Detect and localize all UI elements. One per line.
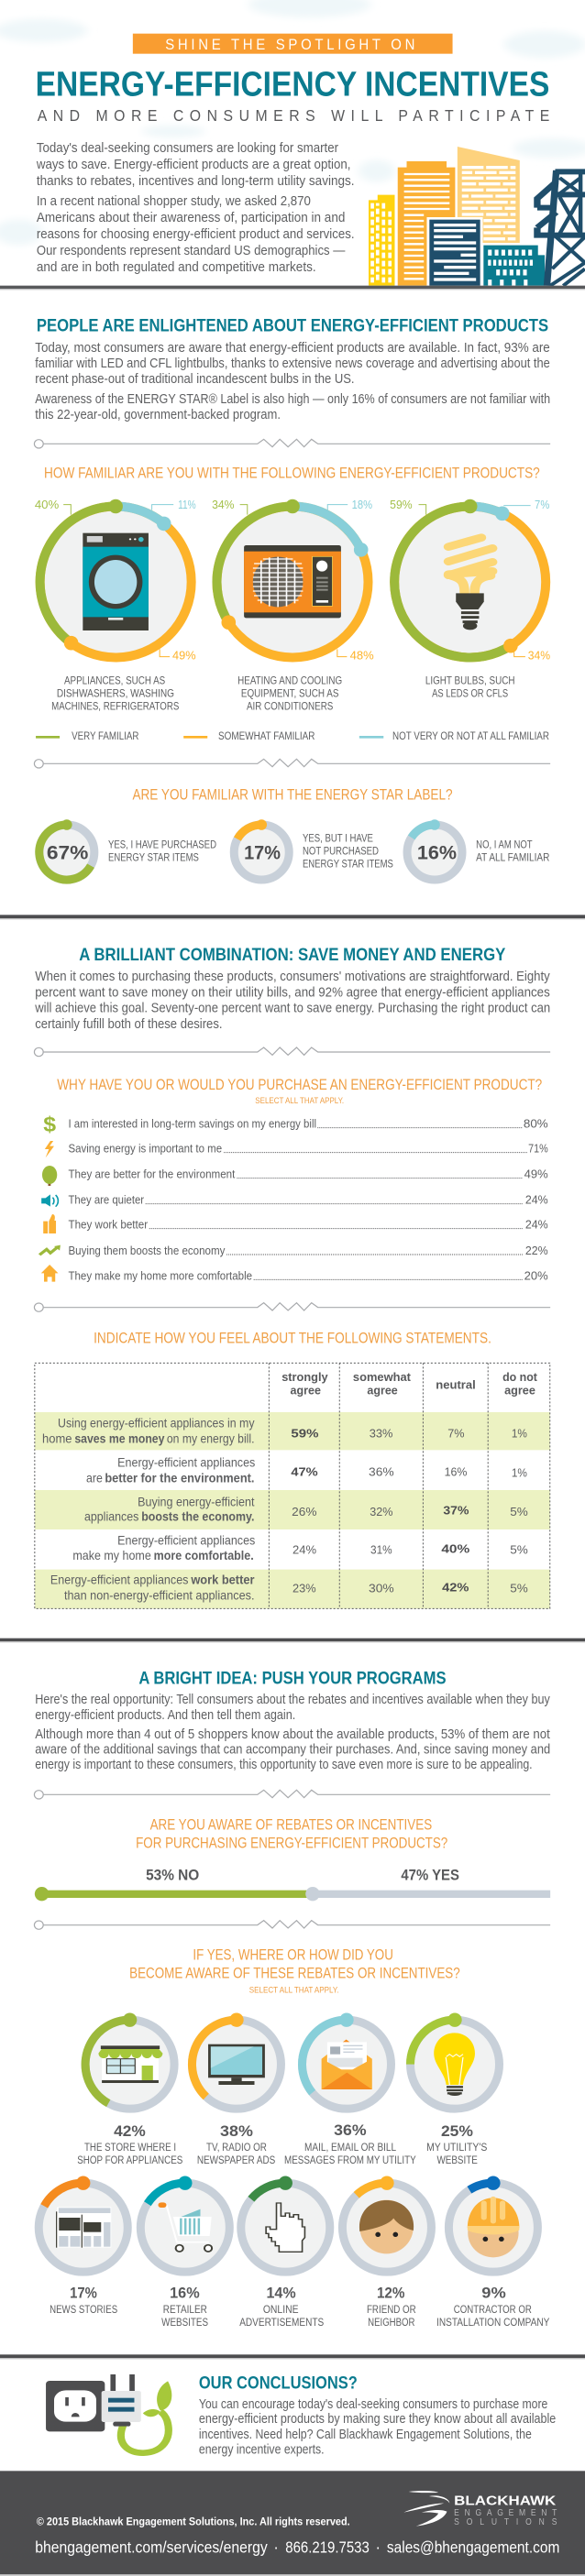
chart: 16% not familiar donut: 16% xyxy=(417,842,457,863)
caption: appliances xyxy=(51,674,180,712)
chart: 67% purchased donut: 67% xyxy=(47,842,89,863)
section rule xyxy=(0,2354,585,2360)
panel: awareness section xyxy=(10,317,575,890)
item: environment 49% xyxy=(42,1166,548,1186)
row: boosts economy xyxy=(84,1496,528,1524)
row: saves money: 59% xyxy=(291,1427,319,1440)
row: boosts economy: 26% xyxy=(292,1505,317,1518)
icon: outlet and plug with leaves xyxy=(46,2374,171,2453)
row: more comfortable: 40% xyxy=(441,1542,470,1555)
item: friend 12% xyxy=(324,2165,450,2329)
icon: hard hat worker xyxy=(468,2198,519,2257)
caption: appliances: DISHWASHERS, WASHING xyxy=(57,687,174,699)
chart: 16% not familiar donut xyxy=(397,815,549,890)
item: saving energy 71%: 71% xyxy=(528,1142,548,1155)
table header: agree xyxy=(291,1385,321,1398)
row: better for environment: 47% xyxy=(291,1465,318,1478)
item: friend 12%: NEIGHBOR xyxy=(368,2316,414,2329)
row: work better: 30% xyxy=(369,1582,394,1595)
row: better for environment: better for the environment. xyxy=(105,1472,254,1485)
text block: intro: Today's deal-seeking consumers are looking for smarter xyxy=(37,140,338,156)
item: mail 36%: MAIL, EMAIL OR BILL xyxy=(304,2141,396,2154)
label: 34%: 34% xyxy=(528,649,551,662)
legend: familiarity xyxy=(36,729,549,742)
banner: shine the spotlight on: SHINE THE SPOTLIGHT ON xyxy=(165,37,414,53)
chart: 53% no vs 47% yes bar: 47% YES xyxy=(401,1867,459,1883)
icon: television xyxy=(208,2044,265,2085)
icon: pointer hand xyxy=(266,2203,304,2252)
item: store 42%: 42% xyxy=(114,2123,146,2140)
item: tv radio 38%: 38% xyxy=(220,2123,253,2140)
text block: intro: Our respondents represent standard US demographics — xyxy=(37,243,346,258)
text block: intro: and are in both regulated and competitive markets. xyxy=(37,259,316,275)
text block: intro: thanks to rebates, incentives and long-term utility savings. xyxy=(37,173,355,189)
item: saving energy 71%: Saving energy is important to me xyxy=(68,1142,222,1155)
item: work better 24% xyxy=(43,1214,548,1233)
text block: conclusions: energy incentive experts. xyxy=(199,2441,325,2457)
row: more comfortable: Energy-efficient appliances xyxy=(117,1534,256,1548)
item: utility website 25%: MY UTILITY'S xyxy=(426,2141,488,2154)
chart: 67% purchased donut xyxy=(29,815,216,890)
heading: why purchase xyxy=(57,1076,542,1106)
row: saves money: 1% xyxy=(512,1427,527,1440)
item: mail 36%: 36% xyxy=(334,2122,367,2139)
background clouds xyxy=(0,0,585,245)
item: online ads 14%: 14% xyxy=(267,2285,296,2301)
caption: heating and cooling: HEATING AND COOLING xyxy=(237,674,342,686)
heading: where or how: SELECT ALL THAT APPLY. xyxy=(249,1986,338,1995)
row: better for environment: 16% xyxy=(445,1465,468,1478)
banner: shine the spotlight on xyxy=(133,34,453,54)
text block: motivations xyxy=(34,969,550,1032)
row: more comfortable: more comfortable. xyxy=(154,1549,254,1563)
contact line: bhengagement.com/services/energy xyxy=(35,2538,268,2557)
item: retailer websites 16%: WEBSITES xyxy=(161,2316,208,2329)
item: economy 22%: 22% xyxy=(525,1244,548,1257)
contact line: · xyxy=(375,2538,381,2557)
item: news stories 17% xyxy=(23,2167,144,2316)
item: utility website 25% xyxy=(410,2012,500,2166)
item: comfortable 20%: 20% xyxy=(524,1269,548,1282)
icon: washing machine xyxy=(83,533,149,630)
logo: Blackhawk Engagement Solutions: BLACKHAWK xyxy=(454,2494,556,2508)
chart: 17% not purchased donut: YES, BUT I HAVE xyxy=(303,832,373,844)
item: economy 22% xyxy=(39,1244,548,1257)
text block: intro: Americans about their awareness of, participation in and xyxy=(37,210,345,225)
item: quieter 24%: 24% xyxy=(525,1193,548,1206)
icon: shopping cart xyxy=(159,2202,212,2252)
caption: heating and cooling: AIR CONDITIONERS xyxy=(247,700,334,712)
label: 34% xyxy=(212,498,248,515)
heading: aware of rebates: ARE YOU AWARE OF REBATES OR INCENTIVES xyxy=(150,1815,432,1833)
icon: light bulb xyxy=(434,2033,475,2096)
chart: 17% not purchased donut: 17% xyxy=(244,842,281,863)
chart: 17% not purchased donut xyxy=(224,815,393,890)
item: tv radio 38%: NEWSPAPER ADS xyxy=(197,2154,276,2166)
caption: light bulbs: LIGHT BULBS, SUCH xyxy=(425,674,515,686)
row: more comfortable: 24% xyxy=(292,1543,316,1556)
table header: do not xyxy=(502,1371,537,1385)
text block: awareness intro: recent phase-out of traditional incandescent bulbs in the US. xyxy=(35,371,355,387)
chart: 53% no vs 47% yes bar xyxy=(35,1867,550,1901)
chart: 67% purchased donut: YES, I HAVE PURCHASED xyxy=(108,839,216,850)
icon: CFL bulb xyxy=(448,538,492,630)
label: 59% xyxy=(390,498,426,515)
copyright: © 2015 Blackhawk Engagement Solutions, Inc. All rights reserved. xyxy=(37,2516,350,2527)
row: work better: Energy-efficient appliances xyxy=(50,1573,189,1587)
item: economy 22%: Buying them boosts the economy xyxy=(68,1244,226,1257)
item: store 42%: SHOP FOR APPLIANCES xyxy=(77,2154,183,2166)
row: boosts economy: appliances xyxy=(84,1510,139,1524)
icon: air conditioner xyxy=(244,545,341,618)
icon: neighbor face xyxy=(359,2200,414,2253)
table header: agree xyxy=(504,1385,535,1398)
chart: heating and cooling familiarity ring xyxy=(188,477,397,712)
chart: 16% not familiar donut: AT ALL FAMILIAR xyxy=(476,851,549,863)
chart: appliances familiarity ring xyxy=(10,477,221,712)
label: 11% xyxy=(152,498,196,511)
item: saving energy 71% xyxy=(45,1141,548,1157)
label: 40% xyxy=(35,498,71,515)
chart: light bulbs familiarity ring xyxy=(366,477,575,699)
row: saves money: 33% xyxy=(370,1427,393,1440)
panel: push your programs section xyxy=(23,1669,555,2329)
item: news stories 17%: NEWS STORIES xyxy=(50,2303,117,2316)
item: long-term savings 80%: 80% xyxy=(524,1117,548,1130)
item: mail 36%: MESSAGES FROM MY UTILITY xyxy=(284,2154,416,2166)
legend: familiarity: VERY FAMILIAR xyxy=(72,729,138,742)
label: 7%: 7% xyxy=(535,498,550,511)
row: boosts economy: 5% xyxy=(510,1505,528,1518)
row: better for environment: 36% xyxy=(369,1465,394,1478)
caption: light bulbs xyxy=(425,674,515,699)
icon: envelope xyxy=(322,2040,372,2089)
chart: 17% not purchased donut: ENERGY STAR ITEMS xyxy=(303,858,393,870)
heading: bright idea: A BRIGHT IDEA: PUSH YOUR PROGRAMS xyxy=(138,1669,447,1688)
caption: heating and cooling: EQUIPMENT, SUCH AS xyxy=(241,687,339,699)
table: agreement statements xyxy=(35,1363,550,1608)
row: more comfortable xyxy=(72,1534,528,1563)
text block: opportunity: energy-efficient products. And then tell them again. xyxy=(35,1707,295,1723)
item: work better 24%: They work better xyxy=(68,1218,148,1231)
text block: conclusions xyxy=(199,2396,556,2457)
icon: newspaper xyxy=(56,2207,111,2248)
item: environment 49%: 49% xyxy=(524,1167,548,1180)
item: friend 12%: FRIEND OR xyxy=(367,2303,416,2316)
row: better for environment: Energy-efficient appliances xyxy=(117,1456,256,1470)
label: 40%: 40% xyxy=(35,498,60,511)
chart: 16% not familiar donut: NO, I AM NOT xyxy=(476,839,533,850)
panel: conclusions xyxy=(46,2374,556,2457)
text block: intro: ways to save. Energy-efficient products are a great option, xyxy=(36,157,350,172)
row: saves money xyxy=(42,1417,527,1446)
item: long-term savings 80%: $ xyxy=(43,1112,57,1136)
text block: intro xyxy=(36,140,355,275)
text block: awareness intro: this 22-year-old, government-backed program. xyxy=(35,407,281,422)
item: work better 24%: 24% xyxy=(525,1218,548,1231)
section rule xyxy=(0,286,585,290)
table header: strongly xyxy=(281,1371,328,1385)
label: 48% xyxy=(337,649,374,662)
caption: appliances: MACHINES, REFRIGERATORS xyxy=(51,700,180,712)
logo: Blackhawk Engagement Solutions xyxy=(403,2491,557,2527)
item: utility website 25%: 25% xyxy=(441,2123,473,2140)
table header: agree xyxy=(367,1385,398,1398)
item: quieter 24%: They are quieter xyxy=(68,1193,144,1206)
chart: 53% no vs 47% yes bar: 53% NO xyxy=(146,1867,199,1883)
subtitle: AND MORE CONSUMERS WILL PARTICIPATE xyxy=(38,106,549,125)
row: boosts economy: Buying energy-efficient xyxy=(138,1496,255,1509)
row: boosts economy: 37% xyxy=(443,1504,469,1517)
item: tv radio 38%: TV, RADIO OR xyxy=(206,2141,267,2154)
item: mail 36% xyxy=(284,2001,416,2166)
item: news stories 17%: 17% xyxy=(70,2285,97,2301)
row: saves money: Using energy-efficient appliances in my xyxy=(58,1417,255,1431)
row: work better: than non-energy-efficient appliances. xyxy=(64,1589,254,1603)
item: long-term savings 80%: I am interested in long-term savings on my energy bill xyxy=(68,1117,316,1130)
item: contractor 9% xyxy=(432,2166,555,2329)
label: 11%: 11% xyxy=(178,498,196,511)
label: 18%: 18% xyxy=(352,498,372,511)
row: boosts economy: 32% xyxy=(370,1505,393,1518)
item: online ads 14%: ADVERTISEMENTS xyxy=(239,2316,324,2329)
section rule xyxy=(0,1639,585,1643)
item: store 42%: THE STORE WHERE I xyxy=(84,2141,176,2154)
item: contractor 9%: 9% xyxy=(481,2285,506,2301)
item: utility website 25%: WEBSITE xyxy=(436,2154,478,2166)
text block: awareness intro xyxy=(35,340,550,422)
list: purchase reasons xyxy=(39,1112,548,1282)
table header xyxy=(281,1371,537,1398)
row: better for environment: 1% xyxy=(512,1466,527,1479)
row: work better: 23% xyxy=(292,1582,316,1595)
row: work better: work better xyxy=(190,1573,255,1587)
table header: neutral xyxy=(436,1379,476,1392)
text block: motivations: certainly fufill both of these desires. xyxy=(35,1016,223,1032)
label: 18% xyxy=(327,498,372,511)
row: more comfortable: 31% xyxy=(370,1543,392,1556)
row: work better: 5% xyxy=(510,1582,528,1595)
caption: appliances: APPLIANCES, SUCH AS xyxy=(64,674,165,686)
heading: aware of rebates xyxy=(136,1815,447,1851)
panel: save money and energy section xyxy=(34,946,550,1608)
item: retailer websites 16%: 16% xyxy=(170,2285,200,2301)
section rule xyxy=(0,915,585,920)
item: online ads 14% xyxy=(223,2165,348,2329)
logo: Blackhawk Engagement Solutions: SOLUTIONS xyxy=(454,2516,557,2527)
item: friend 12%: 12% xyxy=(377,2285,404,2301)
row: more comfortable: make my home xyxy=(72,1549,151,1563)
row: saves money: 7% xyxy=(447,1427,465,1440)
item: store 42% xyxy=(70,2004,190,2166)
heading: why purchase: SELECT ALL THAT APPLY. xyxy=(255,1097,344,1106)
contact line xyxy=(35,2538,559,2557)
chart: 67% purchased donut: ENERGY STAR ITEMS xyxy=(108,851,199,863)
caption: heating and cooling xyxy=(237,674,342,712)
heading: where or how: IF YES, WHERE OR HOW DID YOU xyxy=(193,1946,393,1963)
label: 34% xyxy=(514,649,551,662)
label: 49%: 49% xyxy=(172,649,196,662)
row: saves money: home xyxy=(42,1432,72,1446)
row: saves money: on my energy bill. xyxy=(167,1432,254,1446)
item: long-term savings 80% xyxy=(43,1112,548,1136)
contact line: 866.219.7533 xyxy=(285,2538,370,2557)
contact line: · xyxy=(273,2538,279,2557)
row: better for environment: are xyxy=(86,1472,103,1485)
chart: 17% not purchased donut: NOT PURCHASED xyxy=(303,845,379,857)
item: comfortable 20%: They make my home more comfortable xyxy=(68,1269,252,1282)
icon: store xyxy=(98,2045,162,2083)
logo: Blackhawk Engagement Solutions: ENGAGEMENT xyxy=(454,2507,557,2517)
footer xyxy=(0,2471,585,2576)
illustration: city skyline and power tower xyxy=(369,147,585,286)
text block: opportunity xyxy=(35,1692,550,1772)
row: work better xyxy=(50,1573,528,1603)
row: better for environment xyxy=(86,1456,527,1485)
label: 49% xyxy=(160,649,196,662)
item: tv radio 38% xyxy=(173,2001,300,2166)
row: saves money: saves me money xyxy=(74,1432,165,1446)
row: more comfortable: 5% xyxy=(510,1543,528,1556)
item: retailer websites 16% xyxy=(124,2166,247,2329)
label: 59%: 59% xyxy=(390,498,413,511)
item: retailer websites 16%: RETAILER xyxy=(163,2303,207,2316)
label: 34%: 34% xyxy=(212,498,235,511)
item: environment 49%: They are better for the environment xyxy=(68,1167,235,1180)
text block: intro: reasons for choosing energy-efficient product and services. xyxy=(37,226,355,242)
caption: light bulbs: AS LEDS OR CFLS xyxy=(432,687,508,699)
legend: familiarity: SOMEWHAT FAMILIAR xyxy=(218,729,315,742)
table header: somewhat xyxy=(353,1371,411,1385)
item: comfortable 20% xyxy=(41,1265,548,1282)
item: quieter 24% xyxy=(41,1193,548,1207)
heading: where or how xyxy=(129,1946,460,1995)
row: boosts economy: boosts the economy. xyxy=(141,1510,254,1524)
label: 7% xyxy=(503,498,550,511)
item: online ads 14%: ONLINE xyxy=(263,2303,299,2316)
item: contractor 9%: CONTRACTOR OR xyxy=(454,2303,532,2316)
heading: our conclusions: OUR CONCLUSIONS? xyxy=(199,2374,358,2393)
label: 48%: 48% xyxy=(350,649,374,662)
row: work better: 42% xyxy=(442,1581,469,1594)
text block: intro: In a recent national shopper study, we asked 2,870 xyxy=(37,193,311,209)
